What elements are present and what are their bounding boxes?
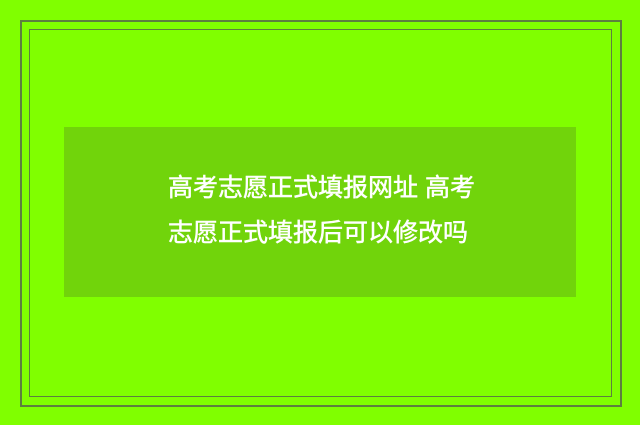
title [168,174,475,247]
title: 高考志愿正式填报网址 高考 [168,174,475,202]
title: 志愿正式填报后可以修改吗 [168,219,468,247]
panel: title background [64,127,576,297]
inner frame [29,29,612,397]
